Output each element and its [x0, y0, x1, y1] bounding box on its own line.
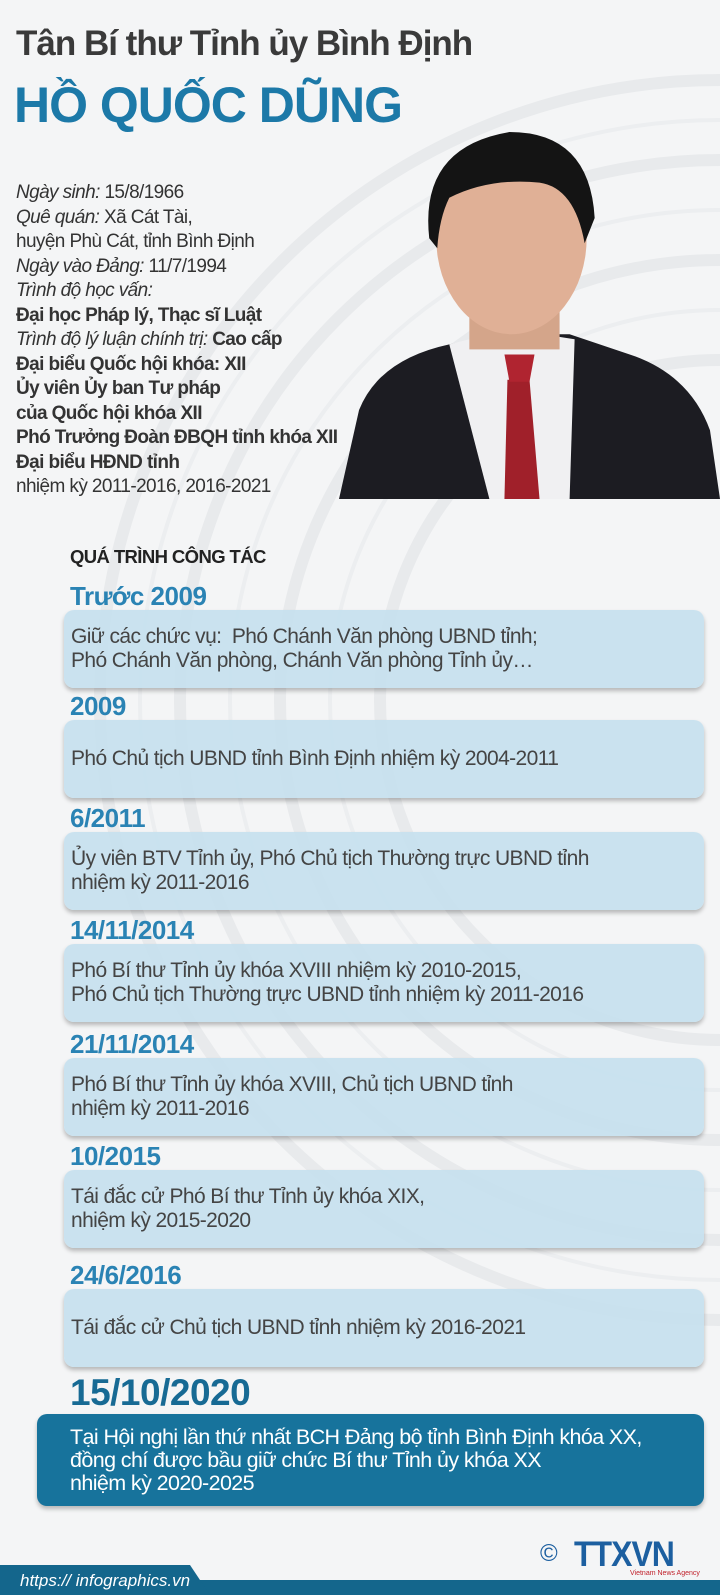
- personal info text: của Quốc hội khóa XII: [16, 402, 202, 424]
- box: 2009: [64, 720, 704, 798]
- title: Tân Bí thư Tỉnh ủy Bình Định: [16, 24, 472, 63]
- box: 10/2015: Tái đắc cử Phó Bí thư Tỉnh ủy khóa XIX,: [71, 1185, 424, 1208]
- personal info text: Đại biểu Quốc hội khóa: XII: [16, 354, 246, 374]
- personal info text: huyện Phù Cát, tỉnh Bình Định: [16, 231, 254, 252]
- box: 10/2015: [64, 1170, 704, 1248]
- box: 6/2011: [64, 832, 704, 910]
- timeline: 14/11/2014: 14/11/2014: [70, 915, 194, 945]
- box: 24/6/2016: [64, 1289, 704, 1367]
- personal info text: Đại học Pháp lý, Thạc sĩ Luật: [16, 304, 262, 326]
- name heading: HỒ QUỐC DŨNG: [14, 77, 402, 133]
- box: 6/2011: Ủy viên BTV Tỉnh ủy, Phó Chủ tịch Thường trực UBND tỉnh: [71, 847, 589, 870]
- personal info text: Ngày vào Đảng: 11/7/1994: [16, 256, 226, 276]
- box: 2009: Phó Chủ tịch UBND tỉnh Bình Định nhiệm kỳ 2004-2011: [71, 747, 558, 770]
- box: 6/2011: nhiệm kỳ 2011-2016: [71, 871, 249, 894]
- logo TTXVN: ©: [540, 1540, 558, 1567]
- personal info text: Quê quán: Xã Cát Tài,: [16, 206, 192, 228]
- personal info text: Đại biểu HĐND tỉnh: [16, 452, 179, 472]
- footer url: https:// infographics.vn: [20, 1571, 190, 1590]
- box: 14/11/2014: Phó Chủ tịch Thường trực UBND tỉnh nhiệm kỳ 2011-2016: [71, 983, 583, 1006]
- box: 21/11/2014: [64, 1058, 704, 1136]
- box: Trước 2009: Giữ các chức vụ: Phó Chánh Văn phòng UBND tỉnh;: [71, 625, 537, 648]
- timeline: 15/10/2020: 15/10/2020: [70, 1372, 250, 1413]
- logo TTXVN: Vietnam News Agency: [630, 1570, 700, 1577]
- personal info text: nhiệm kỳ 2011-2016, 2016-2021: [16, 476, 271, 497]
- timeline: 10/2015: 10/2015: [70, 1141, 160, 1171]
- personal info text: Phó Trưởng Đoàn ĐBQH tỉnh khóa XII: [16, 427, 337, 448]
- box: 15/10/2020 highlight: nhiệm kỳ 2020-2025: [70, 1470, 254, 1494]
- footer bar: [0, 1580, 720, 1595]
- box: 10/2015: nhiệm kỳ 2015-2020: [71, 1209, 250, 1232]
- timeline: 24/6/2016: 24/6/2016: [70, 1260, 181, 1290]
- section heading: QUÁ TRÌNH CÔNG TÁC: [70, 546, 266, 567]
- timeline: 2009: 2009: [70, 691, 126, 721]
- personal info text: Ngày sinh: 15/8/1966: [16, 182, 184, 203]
- box: 14/11/2014: [64, 944, 704, 1022]
- box: 15/10/2020 highlight: đồng chí được bầu giữ chức Bí thư Tỉnh ủy khóa XX: [70, 1448, 541, 1472]
- portrait photo: [339, 132, 720, 499]
- timeline: Trước 2009: Trước 2009: [70, 581, 206, 611]
- personal info text: Trình độ học vấn:: [16, 280, 152, 301]
- box: 21/11/2014: nhiệm kỳ 2011-2016: [71, 1097, 249, 1120]
- box: 24/6/2016: Tái đắc cử Chủ tịch UBND tỉnh nhiệm kỳ 2016-2021: [71, 1316, 526, 1339]
- box: Trước 2009: Phó Chánh Văn phòng, Chánh Văn phòng Tỉnh ủy…: [71, 649, 533, 672]
- logo TTXVN: [540, 1534, 700, 1577]
- box: 15/10/2020 highlight: [37, 1414, 704, 1506]
- box: 14/11/2014: Phó Bí thư Tỉnh ủy khóa XVIII nhiệm kỳ 2010-2015,: [71, 959, 521, 982]
- timeline: 21/11/2014: 21/11/2014: [70, 1029, 194, 1059]
- timeline: 6/2011: 6/2011: [70, 803, 145, 833]
- box: Trước 2009: [64, 610, 704, 688]
- logo TTXVN: TTXVN: [574, 1534, 674, 1574]
- personal info text: Trình độ lý luận chính trị: Cao cấp: [16, 329, 282, 350]
- personal info text: Ủy viên Ủy ban Tư pháp: [16, 378, 220, 399]
- box: 15/10/2020 highlight: Tại Hội nghị lần thứ nhất BCH Đảng bộ tỉnh Bình Định khóa XX,: [70, 1424, 642, 1448]
- box: 21/11/2014: Phó Bí thư Tỉnh ủy khóa XVIII, Chủ tịch UBND tỉnh: [71, 1073, 513, 1096]
- personal info text: [16, 182, 337, 497]
- footer url: [0, 1565, 200, 1590]
